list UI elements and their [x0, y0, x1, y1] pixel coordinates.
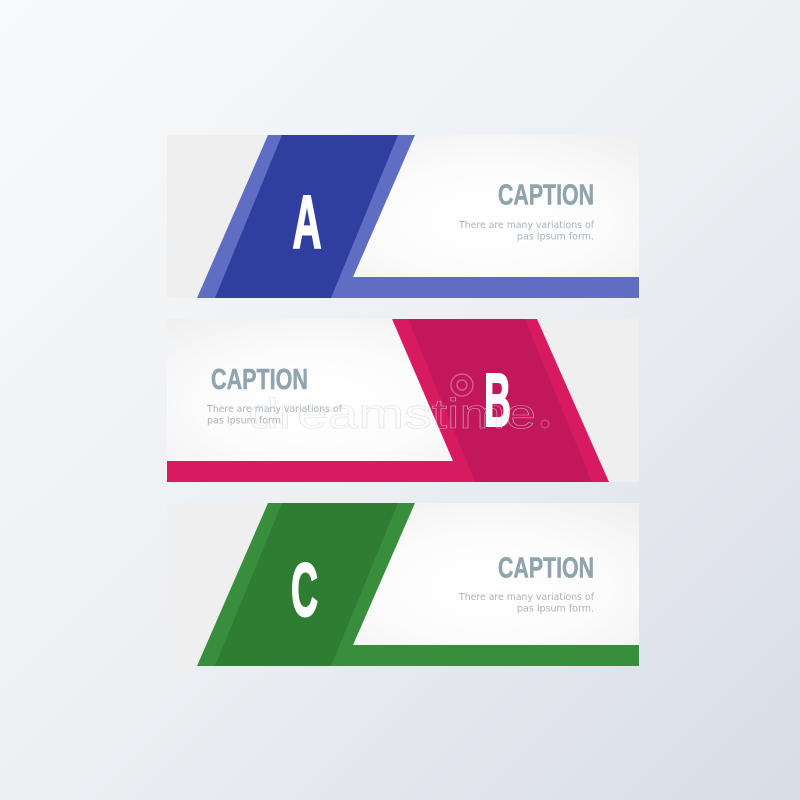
- description B: pas Ipsum form.: [207, 416, 284, 426]
- description A: pas Ipsum form.: [517, 232, 594, 242]
- panel C glow: [340, 503, 639, 645]
- description B: There are many variations of: [206, 404, 343, 415]
- caption A: CAPTION: [498, 180, 594, 212]
- letter A: A: [292, 180, 322, 264]
- caption B: CAPTION: [211, 364, 308, 396]
- panel A inner band: [215, 135, 398, 298]
- description B: [206, 404, 343, 426]
- watermark: dreamstime: [248, 390, 536, 437]
- description A: [458, 220, 595, 242]
- panel: C: [167, 503, 639, 666]
- panel: B: [167, 319, 639, 482]
- panel B glow: [167, 319, 467, 461]
- description C: pas Ipsum form.: [517, 604, 594, 614]
- description A: There are many variations of: [458, 220, 595, 231]
- description C: [458, 592, 595, 614]
- panel C outer band: [197, 503, 639, 666]
- description C: There are many variations of: [458, 592, 595, 603]
- panel A glow: [340, 135, 639, 277]
- panel B inner band: [408, 319, 592, 482]
- panel A outer band: [197, 135, 639, 298]
- panel: A: [167, 135, 639, 298]
- panel C inner band: [215, 503, 398, 666]
- panel B outer band: [167, 319, 609, 482]
- panel: B: B: [484, 358, 511, 442]
- caption C: CAPTION: [498, 552, 594, 584]
- panel: C: C: [291, 548, 318, 632]
- watermark: [248, 374, 549, 437]
